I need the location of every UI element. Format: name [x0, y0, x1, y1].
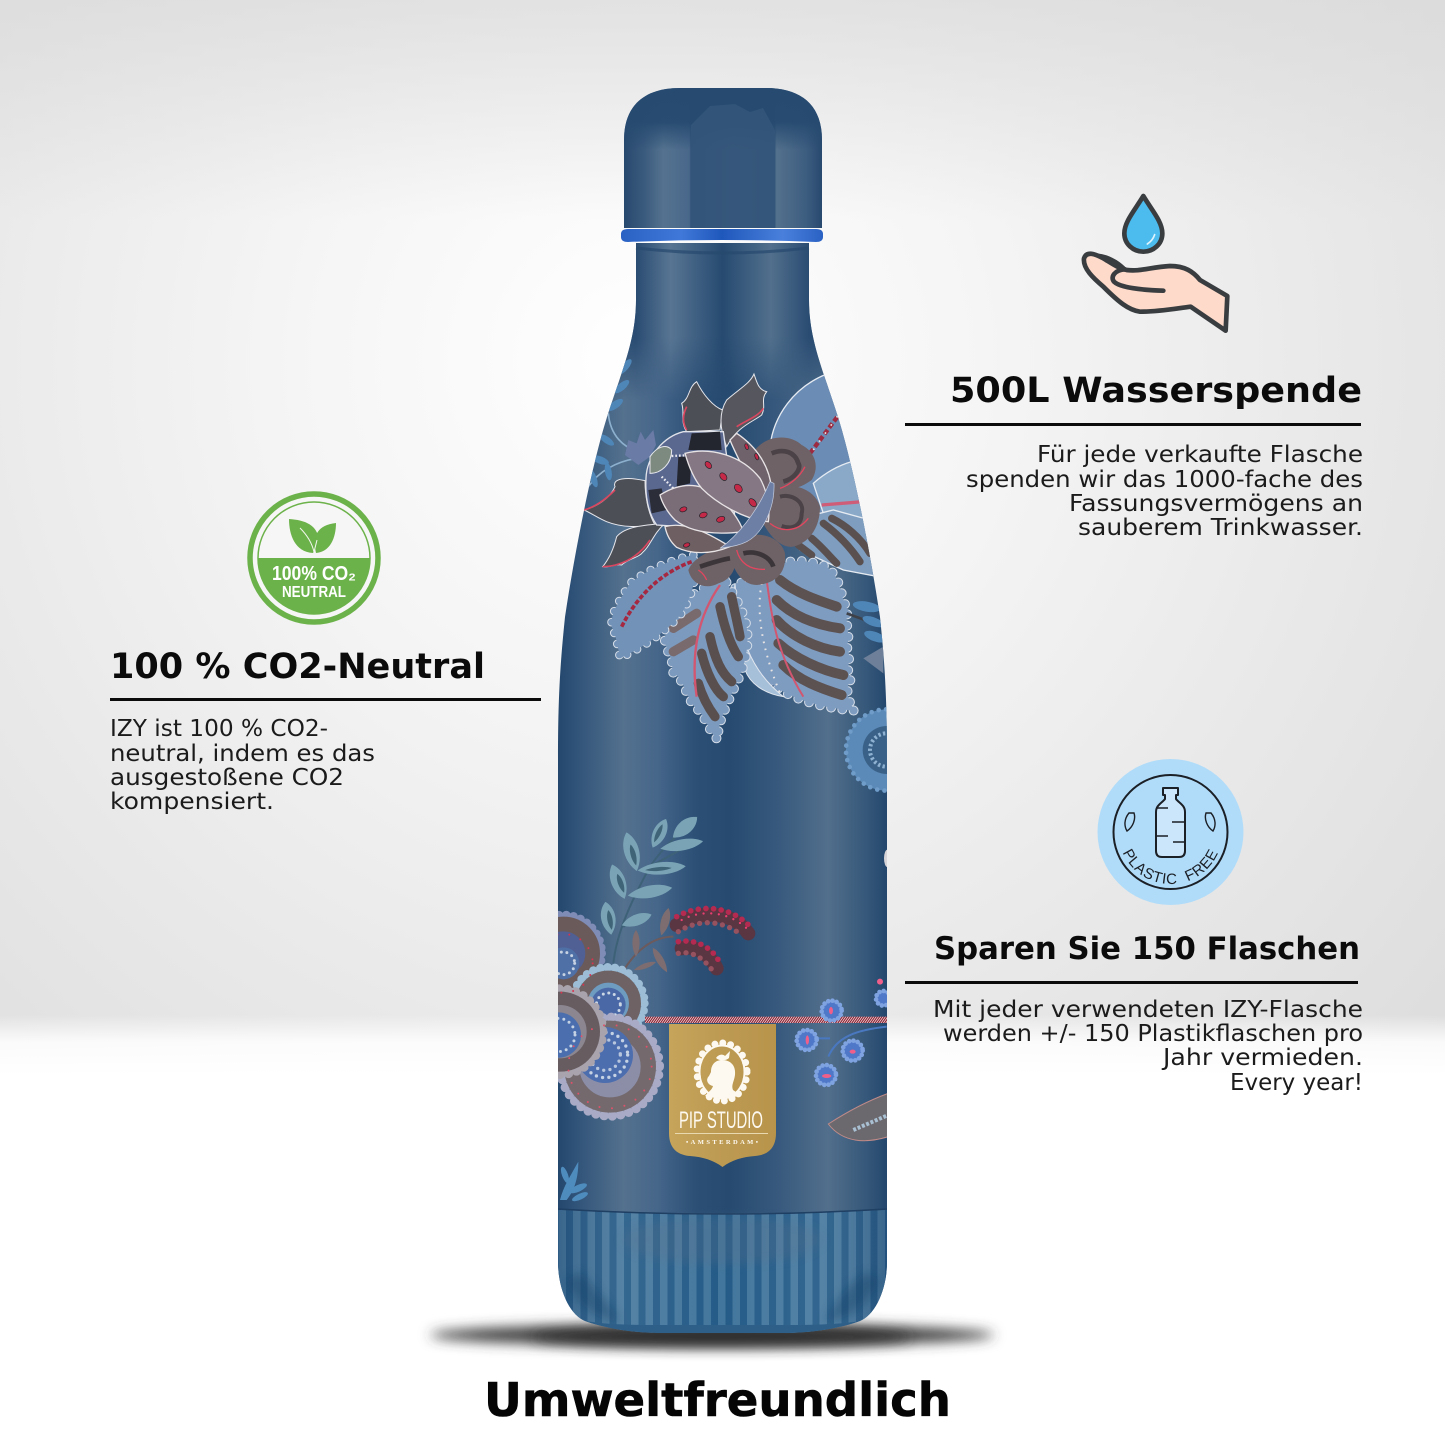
heading: 100 % CO2-Neutral	[110, 647, 485, 687]
bottom-left leaves	[559, 1162, 589, 1203]
body text: Für jede verkaufte Flasche	[1037, 442, 1363, 468]
icon: plastic free badge: PLASTIC FREE	[1123, 848, 1218, 884]
bottle	[558, 88, 887, 1333]
body text: IZY ist 100 % CO2-	[110, 716, 328, 742]
mauve central petals	[660, 433, 772, 553]
body text: Fassungsvermögens an	[1069, 491, 1363, 517]
body text: Every year!	[1230, 1070, 1363, 1096]
body text: ausgestoßene CO2	[110, 765, 344, 791]
central blue blade	[720, 482, 774, 548]
paisley	[844, 707, 887, 793]
body text	[933, 997, 1363, 1096]
body text: Jahr vermieden.	[1161, 1045, 1363, 1071]
heading: 500L Wasserspende	[950, 371, 1362, 411]
heading: Sparen Sie 150 Flaschen	[934, 931, 1360, 967]
brown flower lobes	[688, 437, 820, 586]
icon: CO2 neutral badge: 100% CO₂	[272, 563, 356, 585]
petal seed dots	[679, 443, 759, 548]
body text: sauberem Trinkwasser.	[1078, 515, 1363, 541]
body text: Mit jeder verwendeten IZY-Flasche	[933, 997, 1363, 1023]
bottle body	[558, 243, 887, 1333]
body text: neutral, indem es das	[110, 741, 375, 767]
right edge ornament	[884, 850, 887, 867]
small top-left sprig	[587, 357, 656, 488]
berry branch	[625, 907, 752, 974]
body text	[110, 716, 375, 815]
body text: werden +/- 150 Plastikflaschen pro	[943, 1021, 1363, 1047]
feature: water donation	[905, 196, 1363, 541]
icon: CO2 neutral badge: NEUTRAL	[282, 584, 346, 601]
bottle cap	[621, 88, 823, 242]
lower left petal	[611, 555, 695, 658]
lower floral print	[558, 816, 887, 1202]
dark grey leaves	[584, 374, 767, 567]
feature: CO2 neutral	[110, 494, 541, 815]
brand cameo	[697, 1043, 747, 1101]
icon: CO2 neutral badge	[250, 494, 378, 622]
right feather stripes	[798, 518, 870, 563]
teal leaf sprig	[598, 812, 704, 963]
lower centre feather	[665, 580, 748, 740]
dark lobe accents	[698, 451, 808, 580]
twisted ribbon band	[645, 1017, 888, 1023]
upper-right pale petals	[770, 373, 878, 577]
body text	[966, 442, 1363, 541]
body text: kompensiert.	[110, 789, 274, 815]
ground shadow	[430, 1324, 994, 1347]
grey leaf lower right	[828, 1093, 888, 1141]
body text: spenden wir das 1000-fache des	[966, 467, 1363, 493]
Pip Studio gold label	[669, 1024, 776, 1167]
brand name: PIP STUDIO	[679, 1107, 763, 1134]
blue blossoms	[797, 979, 891, 1085]
icon: plastic free badge	[1098, 759, 1244, 905]
large floral print	[584, 357, 927, 791]
title: Umweltfreundlich	[484, 1373, 951, 1427]
feature: save plastic bottles	[905, 759, 1363, 1096]
right sprig	[847, 599, 887, 673]
brand location: •AMSTERDAM•	[686, 1139, 759, 1146]
striped bulb	[646, 432, 737, 530]
lower right feather	[734, 561, 855, 711]
floral artwork	[517, 357, 927, 1333]
icon: water drop and hand	[1084, 196, 1227, 331]
base stripes	[558, 1209, 887, 1333]
large scalloped flower	[558, 910, 664, 1121]
